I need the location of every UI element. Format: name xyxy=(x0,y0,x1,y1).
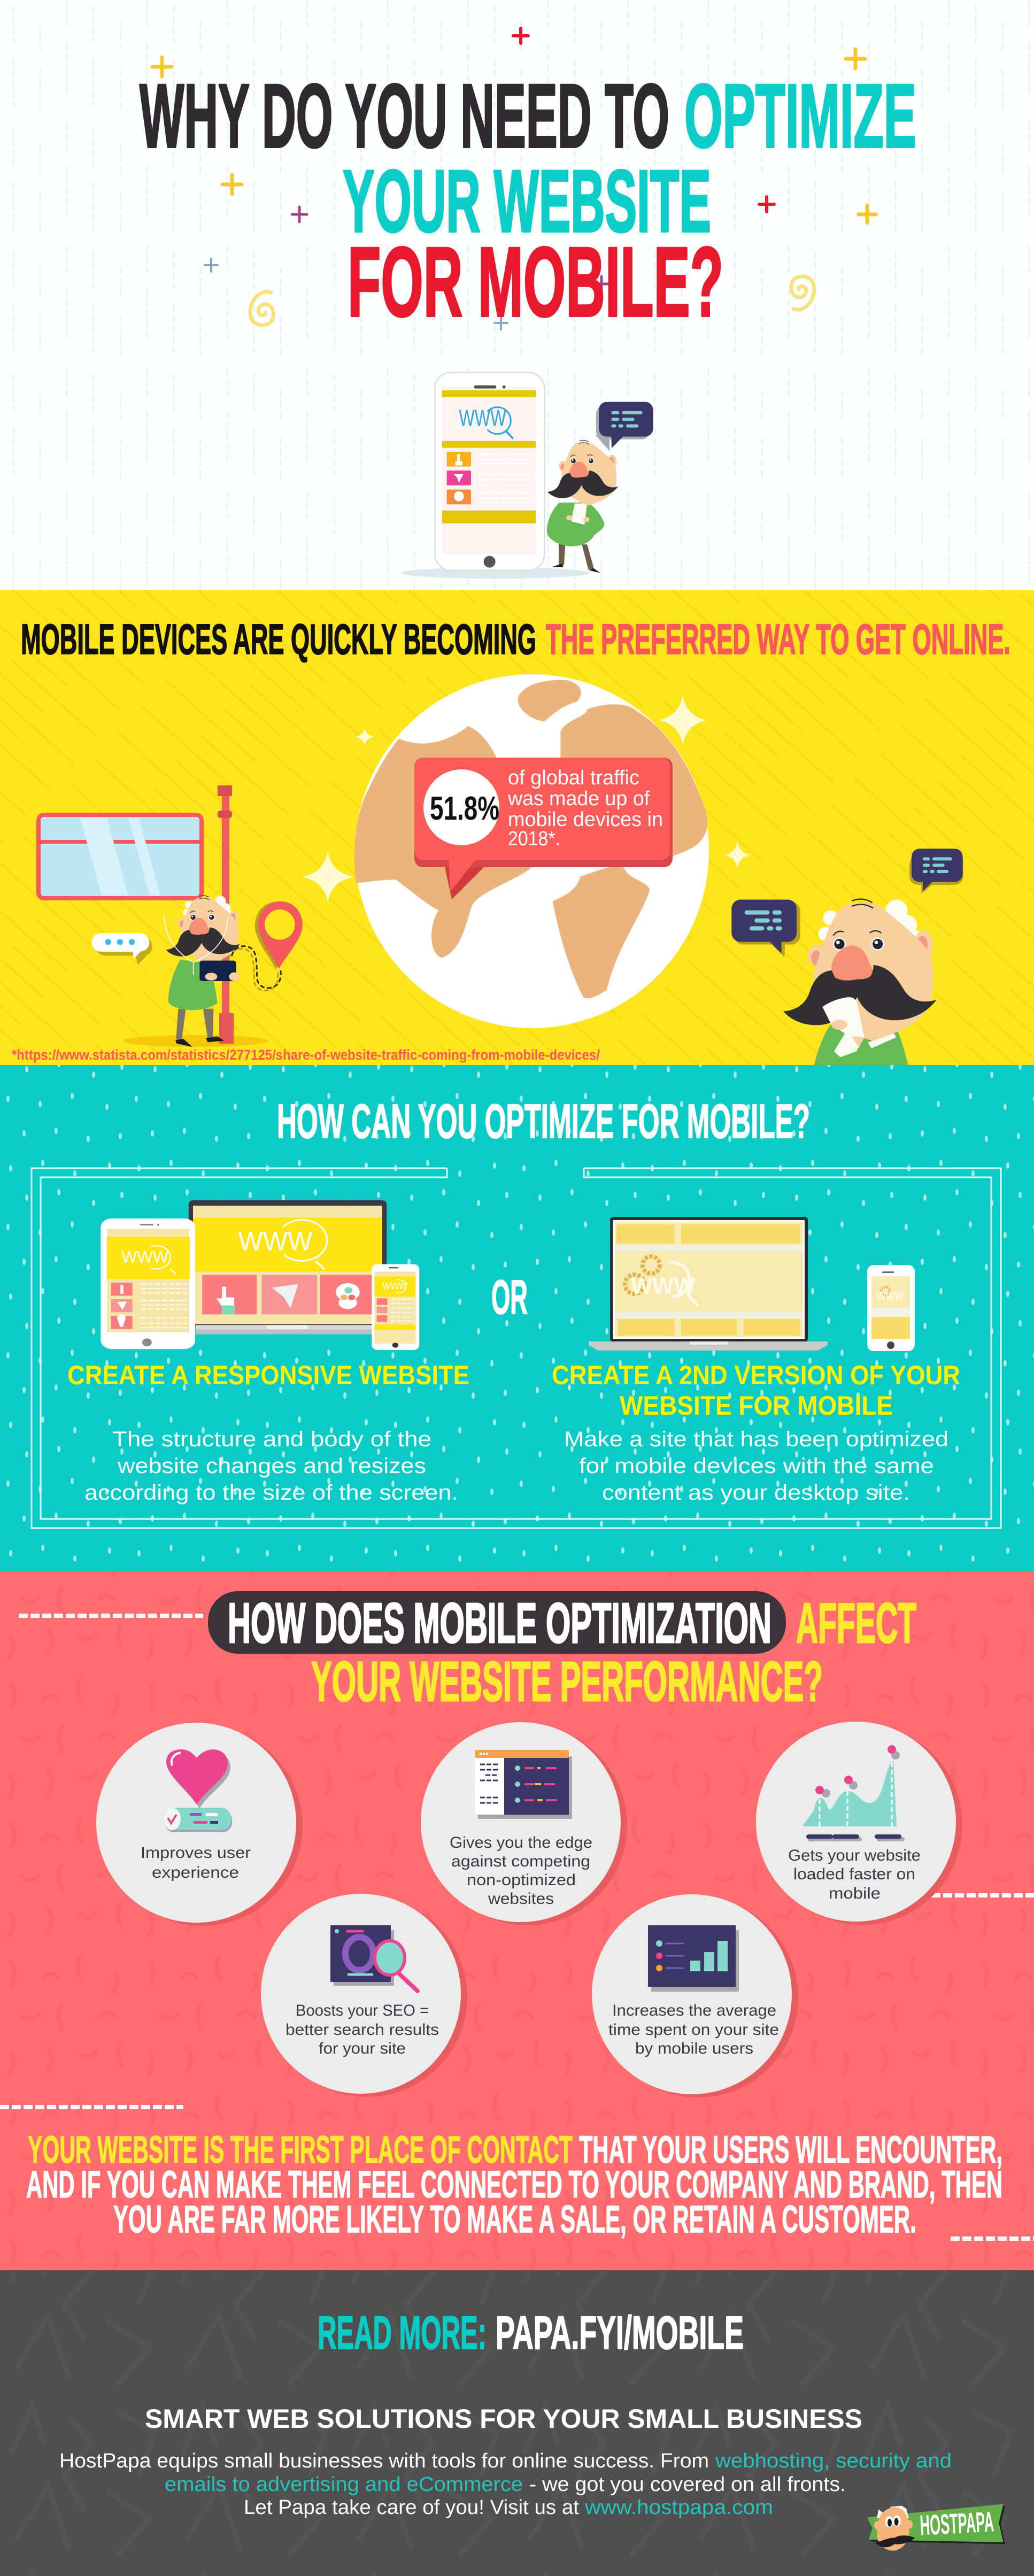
icon: bar chart xyxy=(648,1925,739,1992)
footer paragraph: - we got you covered on all fronts. xyxy=(529,2473,846,2496)
illustration: responsive devices: WWW xyxy=(382,1281,407,1292)
callout: 51.8% of global traffic: mobile devices in xyxy=(508,808,663,831)
callout: 51.8% of global traffic: 51.8% xyxy=(430,790,499,827)
text block: responsive website: The structure and body of the xyxy=(112,1428,431,1451)
text block: second mobile version: WEBSITE FOR MOBILE xyxy=(620,1391,893,1421)
OR label: OR xyxy=(491,1271,528,1324)
panel: gives you the edge xyxy=(421,1722,627,1925)
footer paragraph: webhosting, security and xyxy=(715,2450,952,2472)
label: Gives you the edge xyxy=(450,1834,592,1852)
closing statement xyxy=(26,2129,1002,2241)
illustration: globe xyxy=(354,674,709,1028)
label: by mobile users xyxy=(635,2040,753,2057)
text block: second mobile version xyxy=(552,1360,960,1505)
title xyxy=(140,65,916,337)
text block: responsive website: CREATE A RESPONSIVE WEBSITE xyxy=(67,1360,469,1390)
panel: intro background xyxy=(0,0,1034,590)
icon: performance chart xyxy=(802,1745,902,1839)
label: for your site xyxy=(319,2040,406,2057)
label: loaded faster on xyxy=(793,1865,915,1883)
footer paragraph: www.hostpapa.com xyxy=(584,2496,773,2519)
illustration: responsive devices: WWW xyxy=(238,1226,313,1256)
icon: magnifying glass over report xyxy=(330,1925,418,1991)
label: time spent on your site xyxy=(608,2021,779,2039)
icon: heart xyxy=(164,1749,232,1832)
label: experience xyxy=(152,1864,239,1881)
panel: coral performance section xyxy=(0,1571,1034,2270)
label: Increases the average xyxy=(612,2002,776,2019)
illustration: train window xyxy=(38,815,202,898)
footer paragraph: HostPapa equips small businesses with tools for online success. From xyxy=(59,2450,709,2472)
panel: loaded faster xyxy=(756,1722,962,1925)
text block: second mobile version: Make a site that has been optimized xyxy=(564,1428,948,1451)
panel: boosts SEO xyxy=(261,1894,467,2097)
callout: 51.8% of global traffic: of global traffic xyxy=(508,767,639,789)
footer paragraph: emails to advertising and eCommerce xyxy=(165,2473,523,2496)
label: non-optimized xyxy=(467,1871,576,1889)
label xyxy=(285,2002,439,2057)
label: websites xyxy=(488,1890,554,1908)
read more link: PAPA.FYI/MOBILE xyxy=(496,2307,744,2359)
illustration: mascot on the train with tablet xyxy=(92,785,303,1047)
label xyxy=(608,2002,779,2057)
callout: 51.8% of global traffic xyxy=(414,758,673,899)
title: FOR MOBILE? xyxy=(348,227,723,337)
dashed accent lines xyxy=(0,1616,1034,2239)
panel: dark footer xyxy=(0,2270,1034,2576)
label: against competing xyxy=(451,1853,590,1870)
illustration: responsive devices xyxy=(101,1200,419,1350)
decorative plus marks and spirals xyxy=(152,28,876,329)
illustration: phone with mascot xyxy=(401,373,653,579)
panel: improves user experience xyxy=(96,1723,303,1926)
panel: teal optimization section xyxy=(0,1065,1034,1571)
illustration: phone with mascot: WWW xyxy=(459,406,506,431)
panel: yellow statistics section xyxy=(0,590,1034,1065)
callout: 51.8% of global traffic: 2018*. xyxy=(508,828,560,850)
double line frame xyxy=(32,1168,1001,1528)
sparkles xyxy=(302,695,751,903)
text block: second mobile version: for mobile devices with the same xyxy=(579,1454,934,1478)
illustration: mascot with phone and speech bubbles xyxy=(731,849,963,1066)
heading: how does mobile optimization affect performance xyxy=(208,1591,916,1713)
text block: second mobile version: content as your desktop site. xyxy=(602,1481,910,1505)
footnote: statista source: *https://www.statista.com/statistics/277125/share-of-website-traffic-coming-from-mobile-devices/ xyxy=(12,1047,600,1063)
heading: preferred way to get online: MOBILE DEVICES ARE QUICKLY BECOMING xyxy=(21,615,536,663)
label xyxy=(788,1847,921,1902)
callout: 51.8% of global traffic: was made up of xyxy=(507,788,650,810)
label xyxy=(450,1834,592,1908)
footer heading: SMART WEB SOLUTIONS FOR YOUR SMALL BUSINESS xyxy=(145,2404,862,2434)
text block: responsive website: according to the size of the screen. xyxy=(84,1481,458,1505)
read more link: READ MORE: xyxy=(318,2307,487,2359)
logo: HostPapa xyxy=(867,2504,1005,2551)
icon: browser window xyxy=(475,1750,572,1819)
label: Improves user xyxy=(141,1844,251,1862)
footer paragraph: Let Papa take care of you! Visit us at xyxy=(244,2496,579,2519)
illustration: desktop plus separate mobile version: WWW xyxy=(877,1290,904,1303)
title: YOUR WEBSITE xyxy=(343,152,711,250)
label: Gets your website xyxy=(788,1847,921,1864)
label: Boosts your SEO = xyxy=(296,2002,429,2019)
text block: second mobile version: CREATE A 2ND VERSION OF YOUR xyxy=(552,1360,960,1390)
illustration: responsive devices: WWW xyxy=(121,1247,168,1267)
label: better search results xyxy=(285,2021,439,2039)
closing statement: YOUR WEBSITE IS THE FIRST PLACE OF CONTACT xyxy=(28,2129,573,2171)
illustration: desktop plus separate mobile version xyxy=(589,1217,915,1351)
label: mobile xyxy=(829,1885,881,1902)
text block: responsive website: website changes and resizes xyxy=(117,1454,426,1478)
label xyxy=(141,1844,251,1881)
panel: increases time on site xyxy=(592,1894,798,2097)
text block: responsive website xyxy=(67,1360,469,1505)
heading: how does mobile optimization affect performance: AFFECT xyxy=(796,1592,916,1655)
illustration: desktop plus separate mobile version: WWW xyxy=(631,1273,695,1299)
footer paragraph xyxy=(59,2450,952,2519)
